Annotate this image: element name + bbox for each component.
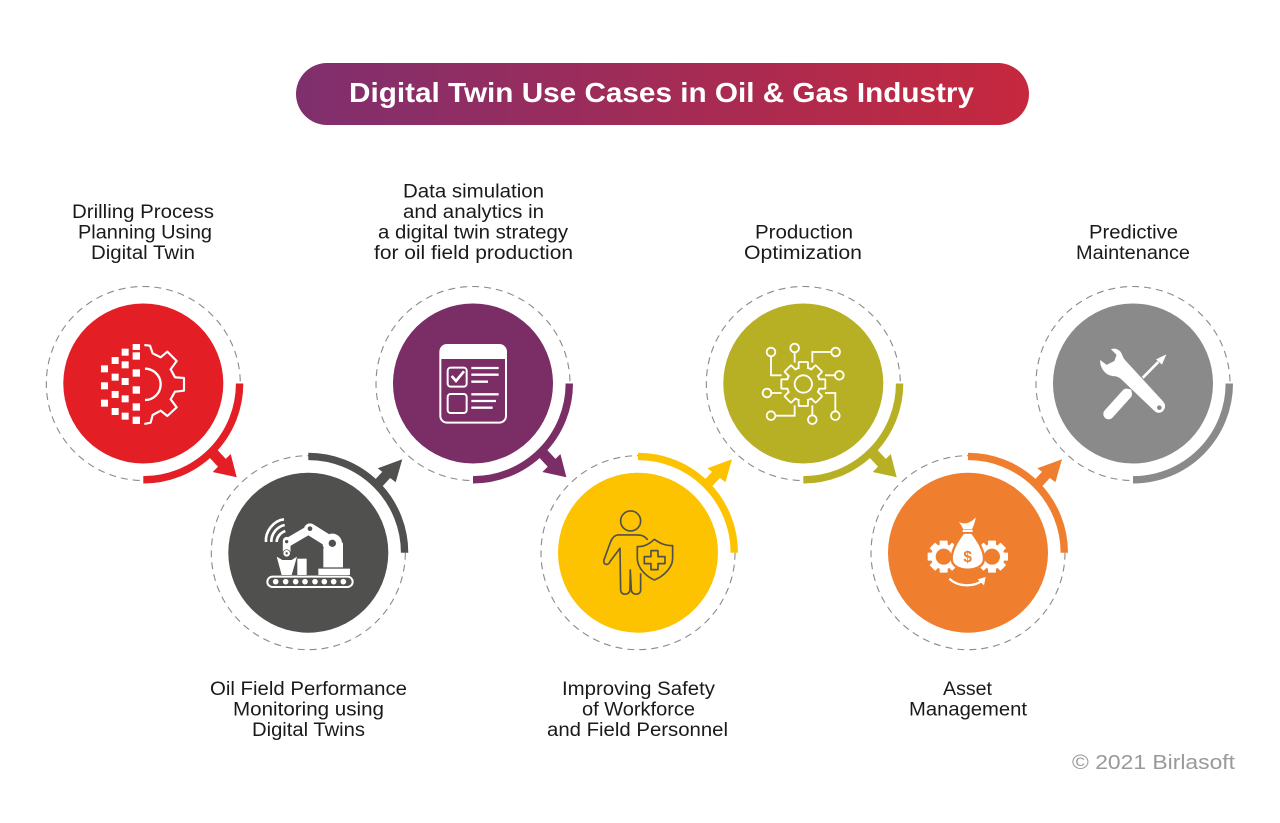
icon: gear with circuit	[763, 344, 844, 424]
step 5: production optimization	[706, 223, 900, 480]
label: predictive maintenance: Predictive	[1089, 223, 1178, 244]
label: asset management	[909, 679, 1028, 721]
dashed ring	[376, 286, 570, 480]
purple disc	[393, 304, 553, 464]
arc arrow	[638, 456, 734, 553]
orange disc	[888, 473, 1048, 633]
icon: money bag and gears	[928, 517, 1008, 585]
dashed ring	[541, 456, 735, 650]
label: asset management: Management	[909, 700, 1028, 721]
dashed ring	[706, 286, 900, 480]
icon: checklist	[440, 345, 506, 423]
label: data simulation and analytics: Data simulation	[403, 182, 544, 202]
label: data simulation and analytics: and analytics in	[403, 202, 544, 223]
dashed ring	[46, 286, 240, 480]
label: production optimization	[744, 223, 862, 264]
red disc	[63, 304, 223, 464]
label: data simulation and analytics	[374, 182, 573, 264]
icon: pixelated gear	[101, 344, 184, 424]
label: oil field performance monitoring: Monitoring using	[233, 700, 384, 721]
label: production optimization: Production	[755, 223, 853, 244]
step 2: oil field performance monitoring	[210, 456, 407, 741]
arc arrow	[143, 384, 240, 480]
label: drilling process planning	[72, 202, 214, 264]
step 7: predictive maintenance	[1036, 223, 1230, 480]
icon: wrench and screwdriver	[1100, 348, 1166, 414]
label: data simulation and analytics: for oil field production	[374, 243, 573, 264]
grey disc	[1053, 304, 1213, 464]
label: predictive maintenance: Maintenance	[1076, 243, 1190, 264]
icon: robot arm on conveyor	[266, 519, 353, 587]
label: oil field performance monitoring: Oil Field Performance	[210, 679, 407, 700]
label: improving safety	[547, 679, 728, 741]
arc	[1133, 384, 1229, 480]
copyright: © 2021 Birlasoft	[1072, 752, 1236, 774]
label: oil field performance monitoring	[210, 679, 407, 741]
dark disc	[228, 473, 388, 633]
arc arrow	[308, 456, 405, 553]
icon: money bag and gears: $	[963, 549, 972, 566]
dashed ring	[1036, 286, 1230, 480]
step 3: data simulation and analytics	[374, 182, 573, 480]
label: data simulation and analytics: a digital twin strategy	[378, 223, 569, 244]
label: drilling process planning: Digital Twin	[91, 243, 195, 264]
label: predictive maintenance	[1076, 223, 1190, 264]
dashed ring	[871, 456, 1065, 650]
olive disc	[723, 304, 883, 464]
title	[296, 63, 1029, 125]
title: Digital Twin Use Cases in Oil & Gas Industry	[349, 77, 974, 108]
label: production optimization: Optimization	[744, 243, 862, 264]
arc arrow	[803, 384, 900, 480]
label: drilling process planning: Planning Using	[78, 223, 212, 244]
dashed ring	[211, 456, 405, 650]
icon: person with shield	[604, 511, 673, 594]
yellow disc	[558, 473, 718, 633]
step 4: improving safety	[541, 456, 735, 741]
step 1: drilling process planning	[46, 202, 240, 480]
label: improving safety: of Workforce	[582, 700, 695, 721]
arc arrow	[968, 456, 1064, 553]
label: drilling process planning: Drilling Process	[72, 202, 214, 223]
arc arrow	[473, 384, 569, 480]
label: improving safety: and Field Personnel	[547, 720, 728, 741]
label: improving safety: Improving Safety	[562, 679, 716, 700]
step 6: asset management	[871, 456, 1065, 721]
label: oil field performance monitoring: Digital Twins	[252, 720, 365, 741]
label: asset management: Asset	[943, 679, 993, 700]
